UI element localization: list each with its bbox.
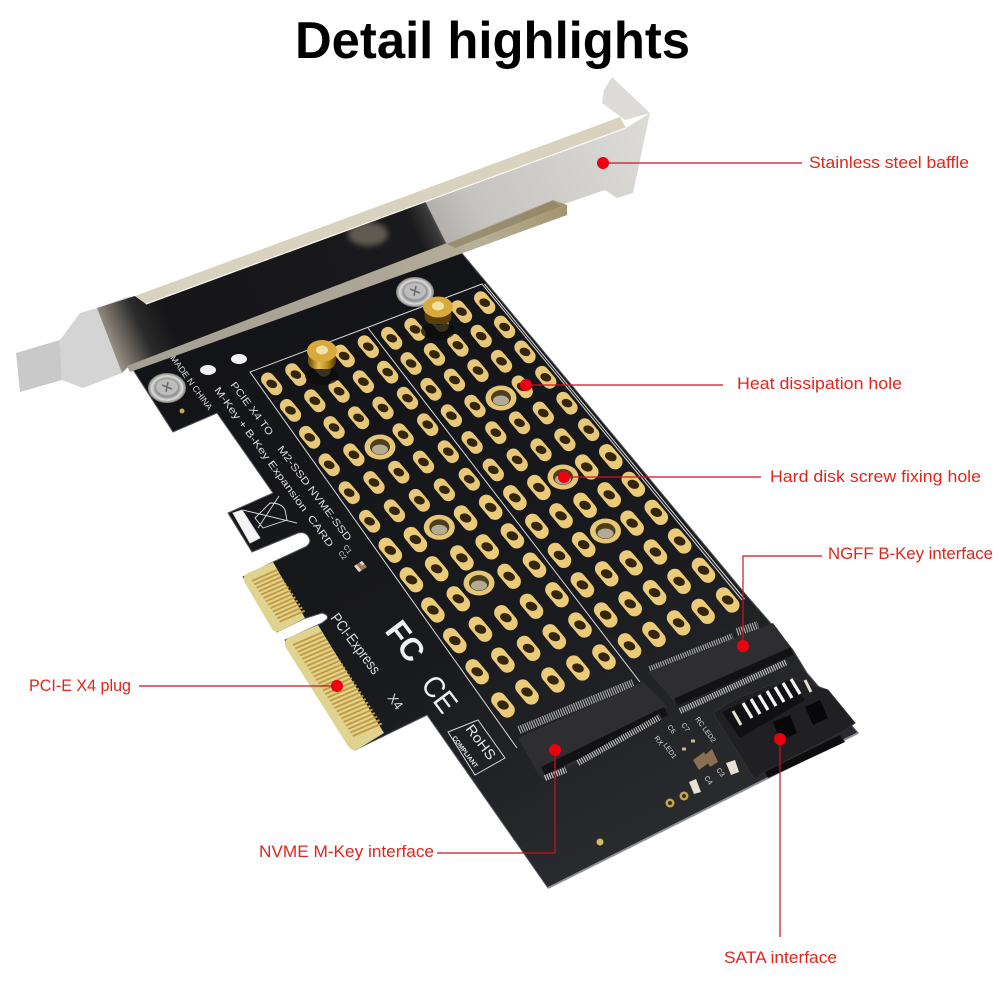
heat dissipation pads: right slot: [378, 289, 743, 661]
screw left: [148, 373, 186, 403]
top folded strip: [135, 117, 626, 304]
silkscreen text: M-Key + B-Key Expansion CARD: [212, 385, 335, 550]
callout: stainless steel baffle: Stainless steel baffle: [809, 153, 969, 172]
dark reflective section: [97, 201, 447, 373]
gold finger short: [244, 562, 305, 632]
callout: SATA interface: SATA interface: [724, 948, 837, 967]
silkscreen text: M2-SSD NVME-SSD: [275, 444, 353, 543]
B-Key connector: [648, 623, 793, 711]
mounting holes: [200, 354, 247, 375]
PCB board: [130, 245, 858, 888]
gold pad under left screw: [180, 408, 184, 414]
reflection blob: [348, 222, 388, 246]
SMD components and labels: RX: [652, 735, 664, 747]
board outline: [130, 245, 858, 888]
callout: heat dissipation hole: [520, 374, 902, 393]
callout: hard disk screw fixing hole: [558, 467, 981, 486]
silkscreen text: C1: [341, 544, 352, 556]
main silver plate: [130, 113, 650, 365]
icon: crossed-out bin: [233, 496, 297, 543]
bend strip shading: [447, 201, 561, 248]
heat dissipation pads: left slot: [258, 333, 619, 721]
strip highlight: [146, 128, 626, 304]
callout: PCI-E X4 plug: [29, 676, 343, 695]
callout: heat dissipation hole: Heat dissipation hole: [737, 374, 902, 393]
SMD components and labels: C3: [714, 767, 725, 779]
callout: PCI-E X4 plug: PCI-E X4 plug: [29, 676, 131, 695]
RoHS mark: RoHS: [463, 721, 499, 763]
bottom edge highlight: [548, 733, 858, 888]
standoff right: [421, 296, 455, 340]
SMD components and labels: C6: [665, 724, 676, 736]
title: Detail highlights: [295, 12, 690, 70]
callout: hard disk screw fixing hole: Hard disk screw fixing hole: [770, 467, 981, 486]
SMD components and labels: C7: [679, 722, 690, 734]
silkscreen slot frame: [250, 284, 744, 748]
callout: NGFF B-Key interface: [737, 544, 993, 652]
gold finger long: [285, 625, 384, 750]
silkscreen text: X4: [385, 691, 406, 713]
top flange: [602, 77, 650, 120]
SATA connector: [713, 677, 855, 780]
FCC logo: FC: [378, 614, 432, 669]
silkscreen text: C2: [336, 550, 347, 562]
lower bend strip: [127, 200, 567, 372]
stainless steel bracket: [16, 77, 650, 392]
tapered bracket foot: [60, 296, 146, 388]
M-Key connector: [518, 682, 668, 780]
silkscreen text: PCIE X4 TO: [228, 380, 275, 438]
callout: SATA interface: [724, 733, 837, 967]
CE logo: CE: [414, 669, 464, 720]
screw right: [396, 277, 434, 307]
callout: NVME M-Key interface: NVME M-Key interface: [259, 842, 434, 861]
callout: NGFF B-Key interface: NGFF B-Key interface: [828, 544, 993, 563]
RoHS mark: [448, 720, 505, 775]
silkscreen text: MADE N CHINA: [168, 353, 215, 412]
callout: stainless steel baffle: [597, 153, 969, 172]
SMD components and labels: [596, 716, 739, 846]
silkscreen text: [168, 353, 406, 713]
silkscreen text: PCI-Express: [327, 610, 384, 678]
SMD components and labels: RC LED2: [693, 716, 716, 744]
left tab: [16, 340, 62, 392]
SMD components and labels: C4: [702, 775, 713, 787]
SMD components and labels: LED1: [661, 742, 677, 760]
standoff left: [305, 340, 339, 385]
callout: NVME M-Key interface: [259, 744, 561, 861]
RoHS mark: COMPLIANT: [450, 735, 479, 770]
capacitor chip: [354, 561, 367, 572]
